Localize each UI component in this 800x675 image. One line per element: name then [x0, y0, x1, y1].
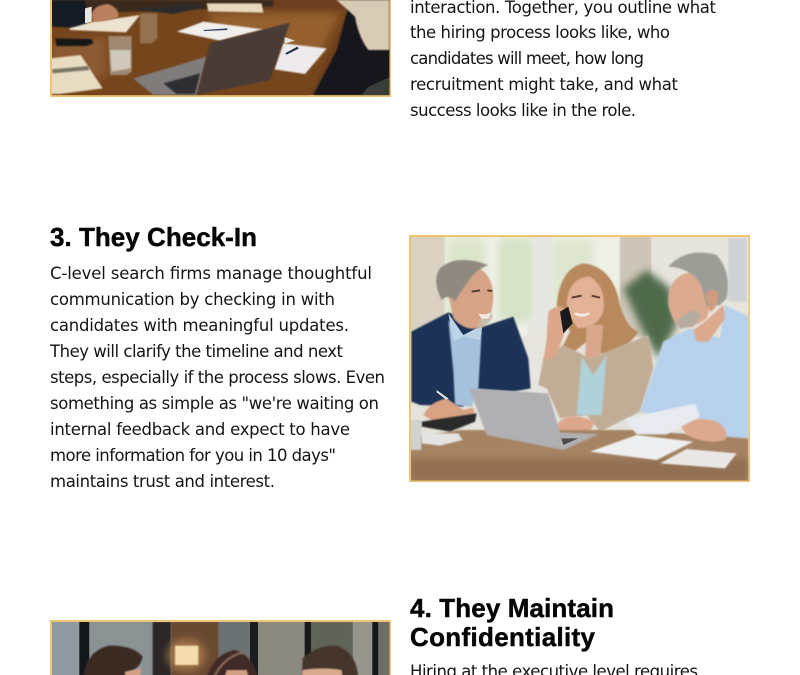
- text: step 2 continuation: success looks like in the role.: [410, 101, 636, 120]
- text: step 2 continuation: [410, 0, 717, 120]
- right man: [640, 305, 748, 438]
- heading: 4. They Maintain Confidentiality: 4. They Maintain: [410, 593, 614, 623]
- heading: 3. They Check-In: 3. They Check-In: [50, 222, 257, 252]
- text: step 3 body: steps, especially if the process slows. Even: [50, 368, 385, 387]
- heading: 4. They Maintain Confidentiality: [410, 593, 614, 652]
- text: step 3 body: maintains trust and interest.: [50, 472, 275, 491]
- text: step 3 body: something as simple as "we're waiting on: [50, 394, 379, 413]
- text: step 2 continuation: the hiring process looks like, who: [410, 23, 670, 42]
- text: step 3 body: communication by checking in with: [50, 290, 335, 309]
- left man: [411, 312, 531, 407]
- text: step 2 continuation: recruitment might take, and what: [410, 75, 679, 94]
- photo: three executives in conversation, cropped: [50, 620, 395, 675]
- text: step 3 body: C-level search firms manage thoughtful: [50, 264, 372, 283]
- text: step 3 body: [49, 264, 385, 491]
- photo: meeting table with laptop: [50, 0, 391, 97]
- text: step 3 body: candidates with meaningful updates.: [50, 316, 349, 335]
- text: step 3 body: They will clarify the timeline and next: [49, 342, 344, 361]
- woman: [557, 263, 638, 355]
- table and laptop: [410, 430, 748, 482]
- text: step 3 body: more information for you in 10 days": [50, 446, 336, 465]
- text: step 2 continuation: candidates will meet, how long: [410, 49, 644, 68]
- text: step 3 body: internal feedback and expect to have: [50, 420, 350, 439]
- photo: three colleagues at a table, woman on phone: [409, 235, 750, 482]
- heading: 4. They Maintain Confidentiality: Confidentiality: [410, 622, 596, 652]
